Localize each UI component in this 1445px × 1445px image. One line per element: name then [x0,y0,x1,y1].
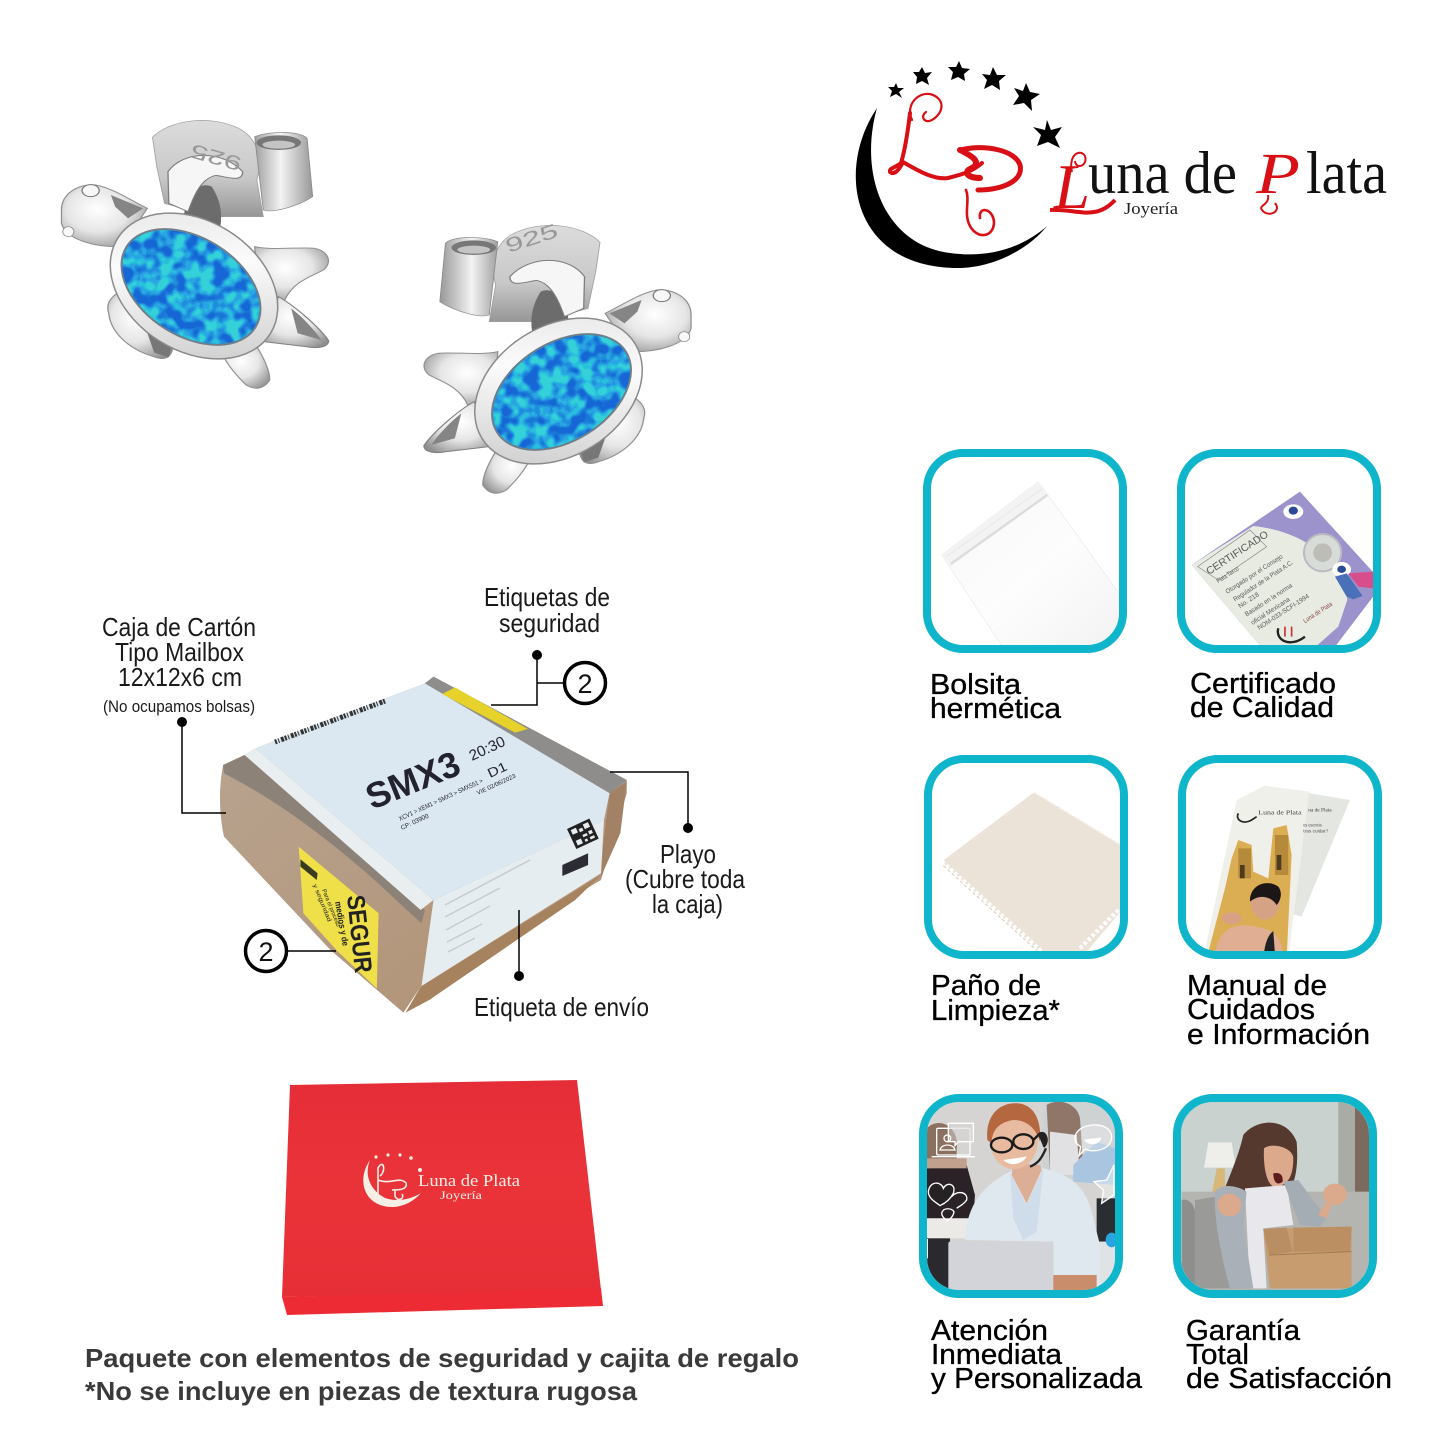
callout: etiquetas de seguridad top: 2 [577,669,593,699]
card: manual de cuidados: tras cuidar? [1303,828,1329,833]
card: certificado de calidad: Plata Taxco [1216,565,1241,585]
QR code [567,819,599,849]
label: de Calidad [1190,692,1334,724]
card: manual de cuidados: Luna de Plata [1258,810,1302,816]
label: Garantía [1186,1315,1300,1347]
footer note [85,1343,799,1406]
wordmark: lata [1306,140,1387,206]
shipping label text [360,733,518,832]
card: certificado de calidad: Basado en la norma [1244,582,1294,618]
card: manual de cuidados: es esencia [1303,823,1322,828]
panel: shipping box diagram [220,677,627,1013]
label: de Satisfacción [1186,1363,1392,1395]
callout: etiquetas de seguridad side [246,930,336,972]
callout: etiqueta de envío: Etiqueta de envío [474,992,649,1022]
label: hermética [930,693,1061,725]
earring: left turtle [61,120,329,389]
panel: red gift box [282,1080,603,1315]
card: garantía total [1177,1098,1392,1395]
label: Certificado [1190,668,1336,700]
callout: playo: (Cubre toda [625,864,745,894]
card: manual de cuidados: na de Plata [1308,808,1332,814]
shipping label text: SMX3 [360,743,466,817]
callout: caja de cartón [102,612,256,813]
label: Inmediata [931,1339,1062,1371]
card: bolsita hermética [927,453,1143,725]
callout: caja de cartón: (No ocupamos bolsas) [103,697,255,716]
security sticker text: medios y de [333,901,351,947]
label: Atención [931,1315,1048,1347]
label: Bolsita [930,669,1021,701]
gift box logo [363,1153,520,1207]
cardboard box [220,677,627,1013]
shipping label text: D1 [485,759,509,781]
wordmark: una de [1088,140,1237,206]
label [931,1315,1142,1395]
callout: caja de cartón: Tipo Mailbox [115,637,244,667]
callout: etiquetas de seguridad top [484,582,610,705]
callout: playo: la caja) [652,889,723,919]
card: certificado de calidad: CERTIFICADO [1205,529,1271,578]
label: Cuidados [1187,994,1315,1026]
label [931,970,1060,1027]
card: certificado de calidad: oficial Mexicana [1250,596,1292,627]
label [1190,668,1336,724]
earring: left turtle: 925 [188,139,244,174]
card: certificado de calidad: Otorgado por el Consejo [1225,553,1285,596]
callout: playo: Playo [660,839,716,869]
LP monogram [890,94,1020,235]
gift box logo: Luna de Plata [418,1171,520,1190]
label: y Personalizada [931,1363,1142,1395]
footer note: *No se incluye en piezas de textura rugosa [85,1376,638,1406]
wordmark: P [1255,141,1300,206]
stars [888,61,1062,148]
wordmark: L [1053,151,1090,222]
shipping label text: CP: 03900 [400,813,430,832]
label: Total [1186,1339,1249,1371]
card: certificado de calidad: NOM-033-SCFI-1994 [1257,593,1311,632]
label [1187,970,1370,1051]
logo: Luna de Plata Joyería [856,61,1387,268]
yellow side sticker [299,847,379,989]
label: Paño de [931,970,1041,1002]
callout: etiquetas de seguridad side: 2 [258,937,274,967]
earring: right turtle: 925 [503,220,561,258]
label: e Información [1187,1019,1370,1051]
footer note: Paquete con elementos de seguridad y cajita de regalo [85,1343,799,1373]
card: atención inmediata [923,1098,1142,1395]
callout: caja de cartón: Caja de Cartón [102,612,256,642]
security sticker text [311,884,377,974]
card: certificado de calidad: Luna de Plata [1302,601,1334,625]
label [930,669,1061,725]
callout: etiquetas de seguridad top: Etiquetas de [484,582,610,612]
security sticker text: SEGUR [341,894,377,974]
callout: etiqueta de envío [474,910,649,1022]
card: paño de limpieza [928,759,1124,1027]
shipping label text: XCV1 > XEM1 > SMX3 > SMX551 > [398,778,484,823]
earring: right turtle [424,220,691,494]
wordmark [1050,140,1387,222]
shipping label text: VIE 02/06/2023 [476,773,518,797]
callout: caja de cartón: 12x12x6 cm [118,662,242,692]
blurred address lines [445,860,530,952]
callout: playo [610,772,745,919]
card: certificado de calidad [1181,453,1383,724]
label: Manual de [1187,970,1327,1002]
label [1186,1315,1392,1395]
card: certificado de calidad: No. 218 [1237,591,1261,610]
card: manual de cuidados [1182,759,1378,1051]
crescent moon [856,108,1047,268]
shipping label text: 20:30 [467,733,508,765]
callout: etiquetas de seguridad top: seguridad [499,608,600,638]
security sticker text: y seguridad [311,884,332,923]
label: Limpieza* [931,995,1060,1027]
card: certificado de calidad: Regulador de la Plata A.C. [1232,559,1295,603]
wordmark: Joyería [1124,199,1178,218]
barcode [275,701,385,742]
gift box logo: Joyería [440,1190,482,1202]
security sticker text: Para el proceso [320,889,341,928]
